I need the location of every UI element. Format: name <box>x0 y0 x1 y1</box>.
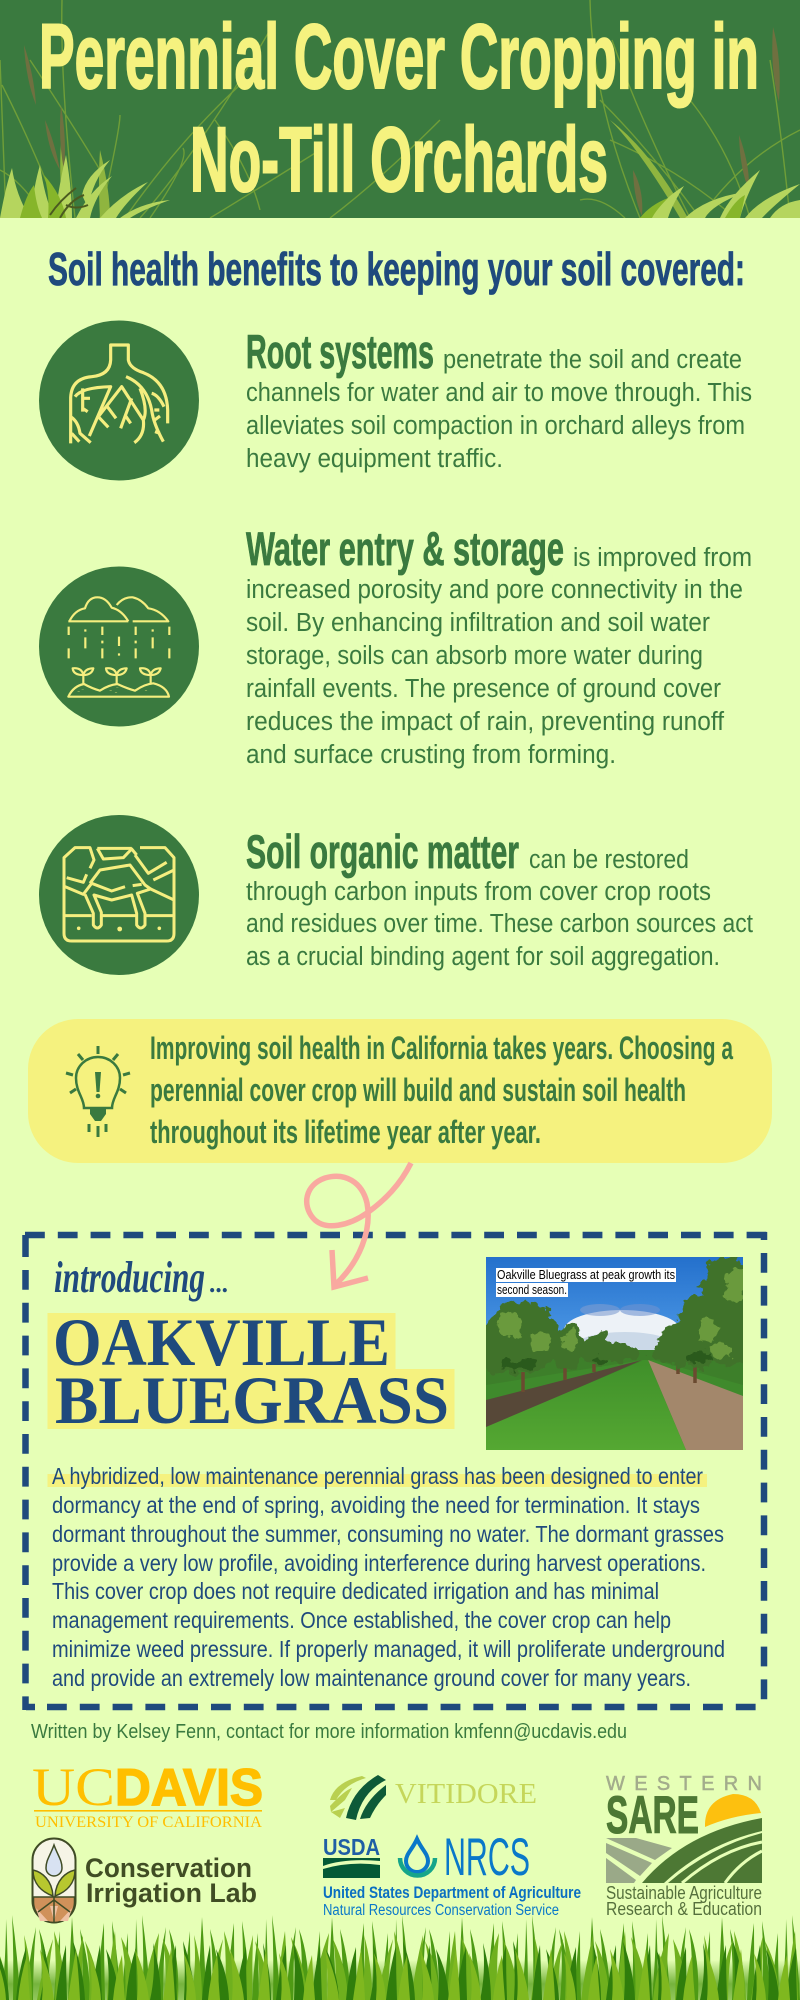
text: water entry and storage: storage, soils can absorb more water during <box>246 642 703 670</box>
description paragraph: provide a very low profile, avoiding interference during harvest operations. <box>52 1550 706 1576</box>
title <box>39 6 759 211</box>
icon: sun <box>705 1794 761 1827</box>
text: water entry and storage: Water entry & storage <box>246 522 564 575</box>
callout text <box>150 1030 733 1150</box>
text: root systems: penetrate the soil and create <box>443 346 742 374</box>
text: root systems: Root systems <box>246 325 434 378</box>
icon: rain and sprouts <box>39 566 199 726</box>
icon: cracked soil <box>39 815 199 975</box>
logo: Western SARE: Sustainable Agriculture <box>606 1883 762 1903</box>
logo: Conservation Irrigation Lab <box>32 1838 257 1922</box>
text: water entry and storage: soil. By enhancing infiltration and soil water <box>246 609 710 637</box>
product name <box>48 1304 454 1438</box>
text: water entry and storage <box>246 522 752 769</box>
header banner <box>0 0 800 218</box>
photo caption: second season. <box>497 1282 567 1297</box>
text: soil organic matter: and residues over time. These carbon sources act <box>246 910 753 938</box>
text: soil organic matter: through carbon inputs from cover crop roots <box>246 878 711 906</box>
product name: BLUEGRASS <box>55 1362 449 1438</box>
logo: UC Davis <box>32 1757 263 1831</box>
description paragraph: management requirements. Once established, the cover crop can help <box>52 1607 671 1633</box>
logo: USDA NRCS: NRCS <box>444 1828 530 1887</box>
callout <box>28 1019 772 1163</box>
benefit: soil organic matter <box>39 815 753 975</box>
photo caption <box>496 1267 676 1297</box>
dashed border <box>25 1232 768 1710</box>
text: water entry and storage: reduces the impact of rain, preventing runoff <box>246 708 725 736</box>
logo: UC Davis: UNIVERSITY OF CALIFORNIA <box>35 1814 262 1831</box>
logo: USDA NRCS: Natural Resources Conservation Service <box>323 1902 559 1919</box>
icon: root systems <box>39 320 199 480</box>
logo: UC Davis: DAVIS <box>115 1759 263 1817</box>
icon: NRCS drop <box>400 1839 435 1876</box>
description paragraph: A hybridized, low maintenance perennial grass has been designed to enter <box>52 1463 703 1489</box>
logo: Vitidore: VITIDORE <box>395 1779 537 1810</box>
logo: Conservation Irrigation Lab: Conservation <box>85 1853 252 1883</box>
text: soil organic matter: as a crucial binding agent for soil aggregation. <box>246 943 720 971</box>
text: water entry and storage: increased porosity and pore connectivity in the <box>246 576 743 604</box>
callout text: throughout its lifetime year after year. <box>150 1114 541 1150</box>
introducing label: ... <box>209 1269 228 1298</box>
logo: Western SARE: SARE <box>606 1786 699 1845</box>
description paragraph: This cover crop does not require dedicated irrigation and has minimal <box>52 1578 659 1604</box>
text: root systems: channels for water and air to move through. This <box>246 379 752 407</box>
text: root systems <box>246 325 752 473</box>
description paragraph: dormancy at the end of spring, avoiding the need for termination. It stays <box>52 1492 700 1518</box>
benefit: water entry and storage <box>39 522 752 769</box>
logo: Conservation Irrigation Lab: Irrigation Lab <box>86 1878 257 1908</box>
logo: Vitidore <box>330 1775 537 1820</box>
logo: USDA NRCS: USDA <box>323 1834 380 1860</box>
grass footer <box>0 1913 800 2000</box>
logo: USDA NRCS: United States Department of Agriculture <box>323 1884 581 1902</box>
text: soil organic matter <box>246 825 753 971</box>
description paragraph: and provide an extremely low maintenance ground cover for many years. <box>52 1665 691 1691</box>
logo: Western SARE <box>606 1773 762 1919</box>
product name: OAKVILLE <box>53 1304 390 1380</box>
photo: orchard <box>478 1254 758 1450</box>
icon: capsule emblem <box>32 1838 76 1922</box>
arrow <box>307 1163 411 1287</box>
text: root systems: heavy equipment traffic. <box>246 445 503 473</box>
icon: fields <box>606 1818 762 1883</box>
text: soil organic matter: Soil organic matter <box>246 825 519 878</box>
logo: Western SARE: WESTERN <box>606 1773 762 1795</box>
text: root systems: alleviates soil compaction in orchard alleys from <box>246 412 745 440</box>
icon: light bulb <box>66 1046 130 1137</box>
text: water entry and storage: is improved from <box>573 544 752 572</box>
logo: USDA NRCS <box>323 1828 581 1919</box>
logo: UC Davis: UC <box>32 1757 115 1817</box>
benefit: root systems <box>39 320 752 480</box>
byline: Written by Kelsey Fenn, contact for more information kmfenn@ucdavis.edu <box>31 1721 627 1743</box>
header grass: left clump <box>0 0 800 218</box>
description paragraph <box>48 1463 725 1691</box>
text: water entry and storage: and surface crusting from forming. <box>246 741 616 769</box>
text: soil organic matter: can be restored <box>529 846 689 874</box>
text: water entry and storage: rainfall events. The presence of ground cover <box>246 675 721 703</box>
photo caption: Oakville Bluegrass at peak growth its <box>497 1267 675 1282</box>
introducing label: introducing <box>54 1253 205 1302</box>
logo: Western SARE: Research & Education <box>606 1899 762 1919</box>
